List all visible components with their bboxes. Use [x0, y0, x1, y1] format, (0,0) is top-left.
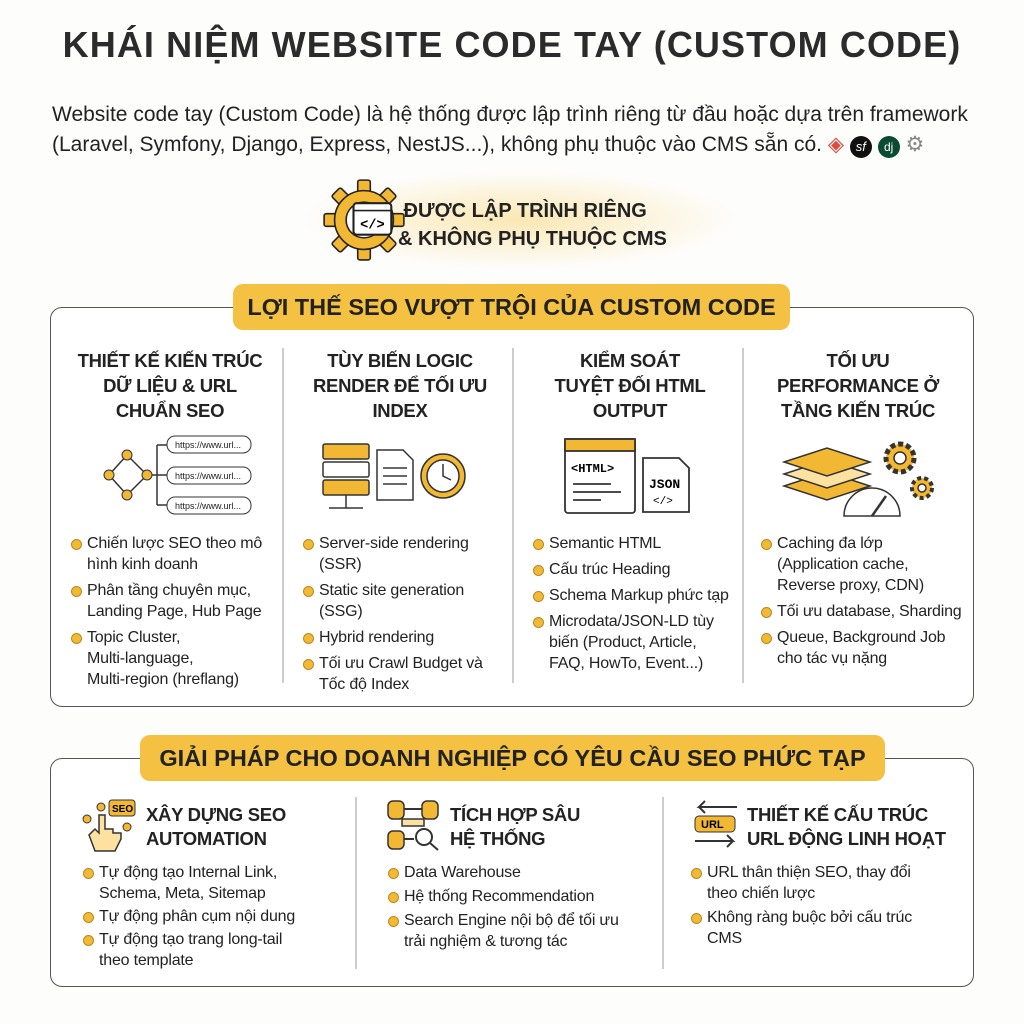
- callout text: ĐƯỢC LẬP TRÌNH RIÊNG: [404, 200, 647, 222]
- icon: databases search: [387, 800, 439, 851]
- icon: html json: [564, 438, 690, 514]
- panel: SEO advantages: Topic Cluster,: [87, 629, 180, 646]
- panel: solutions: [50, 758, 974, 987]
- panel: solutions: Tự động tạo Internal Link, Schema, Meta, Sitemap: [99, 864, 277, 902]
- panel: SEO advantages: Tối ưu database, Sharding: [777, 603, 962, 620]
- panel: SEO advantages: [50, 307, 974, 707]
- panel: solutions: URL thân thiện SEO, thay đổi theo chiến lược: [707, 864, 911, 902]
- icon: html json: JSON: [649, 477, 680, 492]
- heading: XÂY DỰNG SEO AUTOMATION: [146, 804, 286, 849]
- column: performance: TỐI ƯU PERFORMANCE Ở TẦNG KIẾN TRÚC: [777, 350, 939, 421]
- panel: SEO advantages: Multi-region (hreflang): [87, 671, 239, 688]
- column: dynamic URL: [691, 800, 946, 947]
- column: system integration: [387, 800, 619, 950]
- column: HTML output: KIỂM SOÁT TUYỆT ĐỐI HTML OUTPUT: [554, 350, 705, 421]
- panel: SEO advantages: Tối ưu Crawl Budget và Tốc độ Index: [319, 655, 483, 693]
- icon: hand SEO: SEO: [112, 804, 133, 815]
- header pill: SEO advantages: LỢI THẾ SEO VƯỢT TRỘI CỦA CUSTOM CODE: [247, 294, 776, 320]
- subtitle text: dj: [884, 140, 893, 154]
- heading: THIẾT KẾ CẤU TRÚC URL ĐỘNG LINH HOẠT: [747, 804, 946, 849]
- column: render logic: TÙY BIẾN LOGIC RENDER ĐỂ TỐI ƯU INDEX: [313, 350, 487, 421]
- panel: SEO advantages: Cấu trúc Heading: [549, 561, 670, 578]
- callout: custom programmed: [323, 176, 714, 264]
- icon: layers gauge gears: [782, 442, 934, 517]
- panel: SEO advantages: Static site generation (SSG): [319, 582, 464, 620]
- subtitle text: sf: [856, 139, 866, 154]
- icon: url tree: https://www.url...: [175, 501, 241, 511]
- subtitle text: Website code tay (Custom Code) là hệ thống được lập trình riêng từ đầu hoặc dựa trên framework (Laravel, Symfony, Django, Express, NestJS...), không phụ thuộc vào CMS sẵn có. ◈ ⚙: [52, 103, 968, 156]
- panel: SEO advantages: Schema Markup phức tạp: [549, 587, 729, 604]
- column: render logic: [303, 350, 487, 693]
- panel: solutions: Tự động tạo trang long-tail theo template: [99, 931, 282, 969]
- column: URL architecture: [71, 350, 262, 688]
- header pill: solutions: GIẢI PHÁP CHO DOANH NGHIỆP CÓ YÊU CẦU SEO PHỨC TẠP: [159, 745, 866, 771]
- panel: SEO advantages: Server-side rendering (SSR): [319, 535, 469, 573]
- callout text: & KHÔNG PHỤ THUỘC CMS: [398, 228, 667, 250]
- panel: SEO advantages: Semantic HTML: [549, 535, 661, 552]
- icon: url tree: https://www.url...: [175, 471, 241, 481]
- panel: SEO advantages: Caching đa lớp: [777, 535, 883, 552]
- column: performance: [761, 350, 962, 667]
- icon: url tree: [104, 436, 252, 514]
- panel: solutions: Hệ thống Recommendation: [404, 888, 594, 905]
- icon: hand SEO: [82, 800, 136, 852]
- column: URL architecture: THIẾT KẾ KIẾN TRÚC DỮ LIỆU & URL CHUẨN SEO: [78, 350, 262, 421]
- icon: gear with code window: [323, 179, 405, 261]
- icon: URL arrows: URL: [701, 819, 724, 831]
- panel: SEO advantages: Chiến lược SEO theo mô hình kinh doanh: [87, 535, 262, 573]
- panel: SEO advantages: Queue, Background Job cho tác vụ nặng: [777, 629, 945, 667]
- panel: SEO advantages: Phân tầng chuyên mục, Landing Page, Hub Page: [87, 582, 261, 620]
- title: KHÁI NIỆM WEBSITE CODE TAY (CUSTOM CODE): [63, 24, 961, 65]
- icon: server doc clock: [322, 443, 466, 509]
- panel: SEO advantages: Multi-language,: [87, 650, 193, 667]
- icon: gear with code window: </>: [360, 218, 385, 233]
- panel: solutions: Tự động phân cụm nội dung: [99, 908, 295, 925]
- panel: SEO advantages: Reverse proxy, CDN): [777, 577, 924, 594]
- column: HTML output: [533, 350, 729, 672]
- panel: solutions: Search Engine nội bộ để tối ưu trải nghiệm & tương tác: [404, 912, 619, 950]
- icon: html json: <HTML>: [571, 462, 614, 476]
- column: SEO automation: [82, 800, 295, 969]
- panel: SEO advantages: (Application cache,: [777, 556, 908, 573]
- header pill: solutions: [140, 735, 885, 781]
- icon: url tree: https://www.url...: [175, 440, 241, 450]
- header pill: SEO advantages: [233, 284, 790, 330]
- icon: html json: </>: [653, 496, 673, 508]
- panel: SEO advantages: Microdata/JSON-LD tùy biến (Product, Article, FAQ, HowTo, Event...): [549, 613, 714, 672]
- icon: URL arrows: [694, 800, 737, 848]
- heading: TÍCH HỢP SÂU HỆ THỐNG: [450, 804, 580, 849]
- callout text: [398, 198, 667, 250]
- panel: solutions: Data Warehouse: [404, 864, 521, 881]
- panel: solutions: Không ràng buộc bởi cấu trúc CMS: [707, 909, 912, 947]
- panel: SEO advantages: Hybrid rendering: [319, 629, 434, 646]
